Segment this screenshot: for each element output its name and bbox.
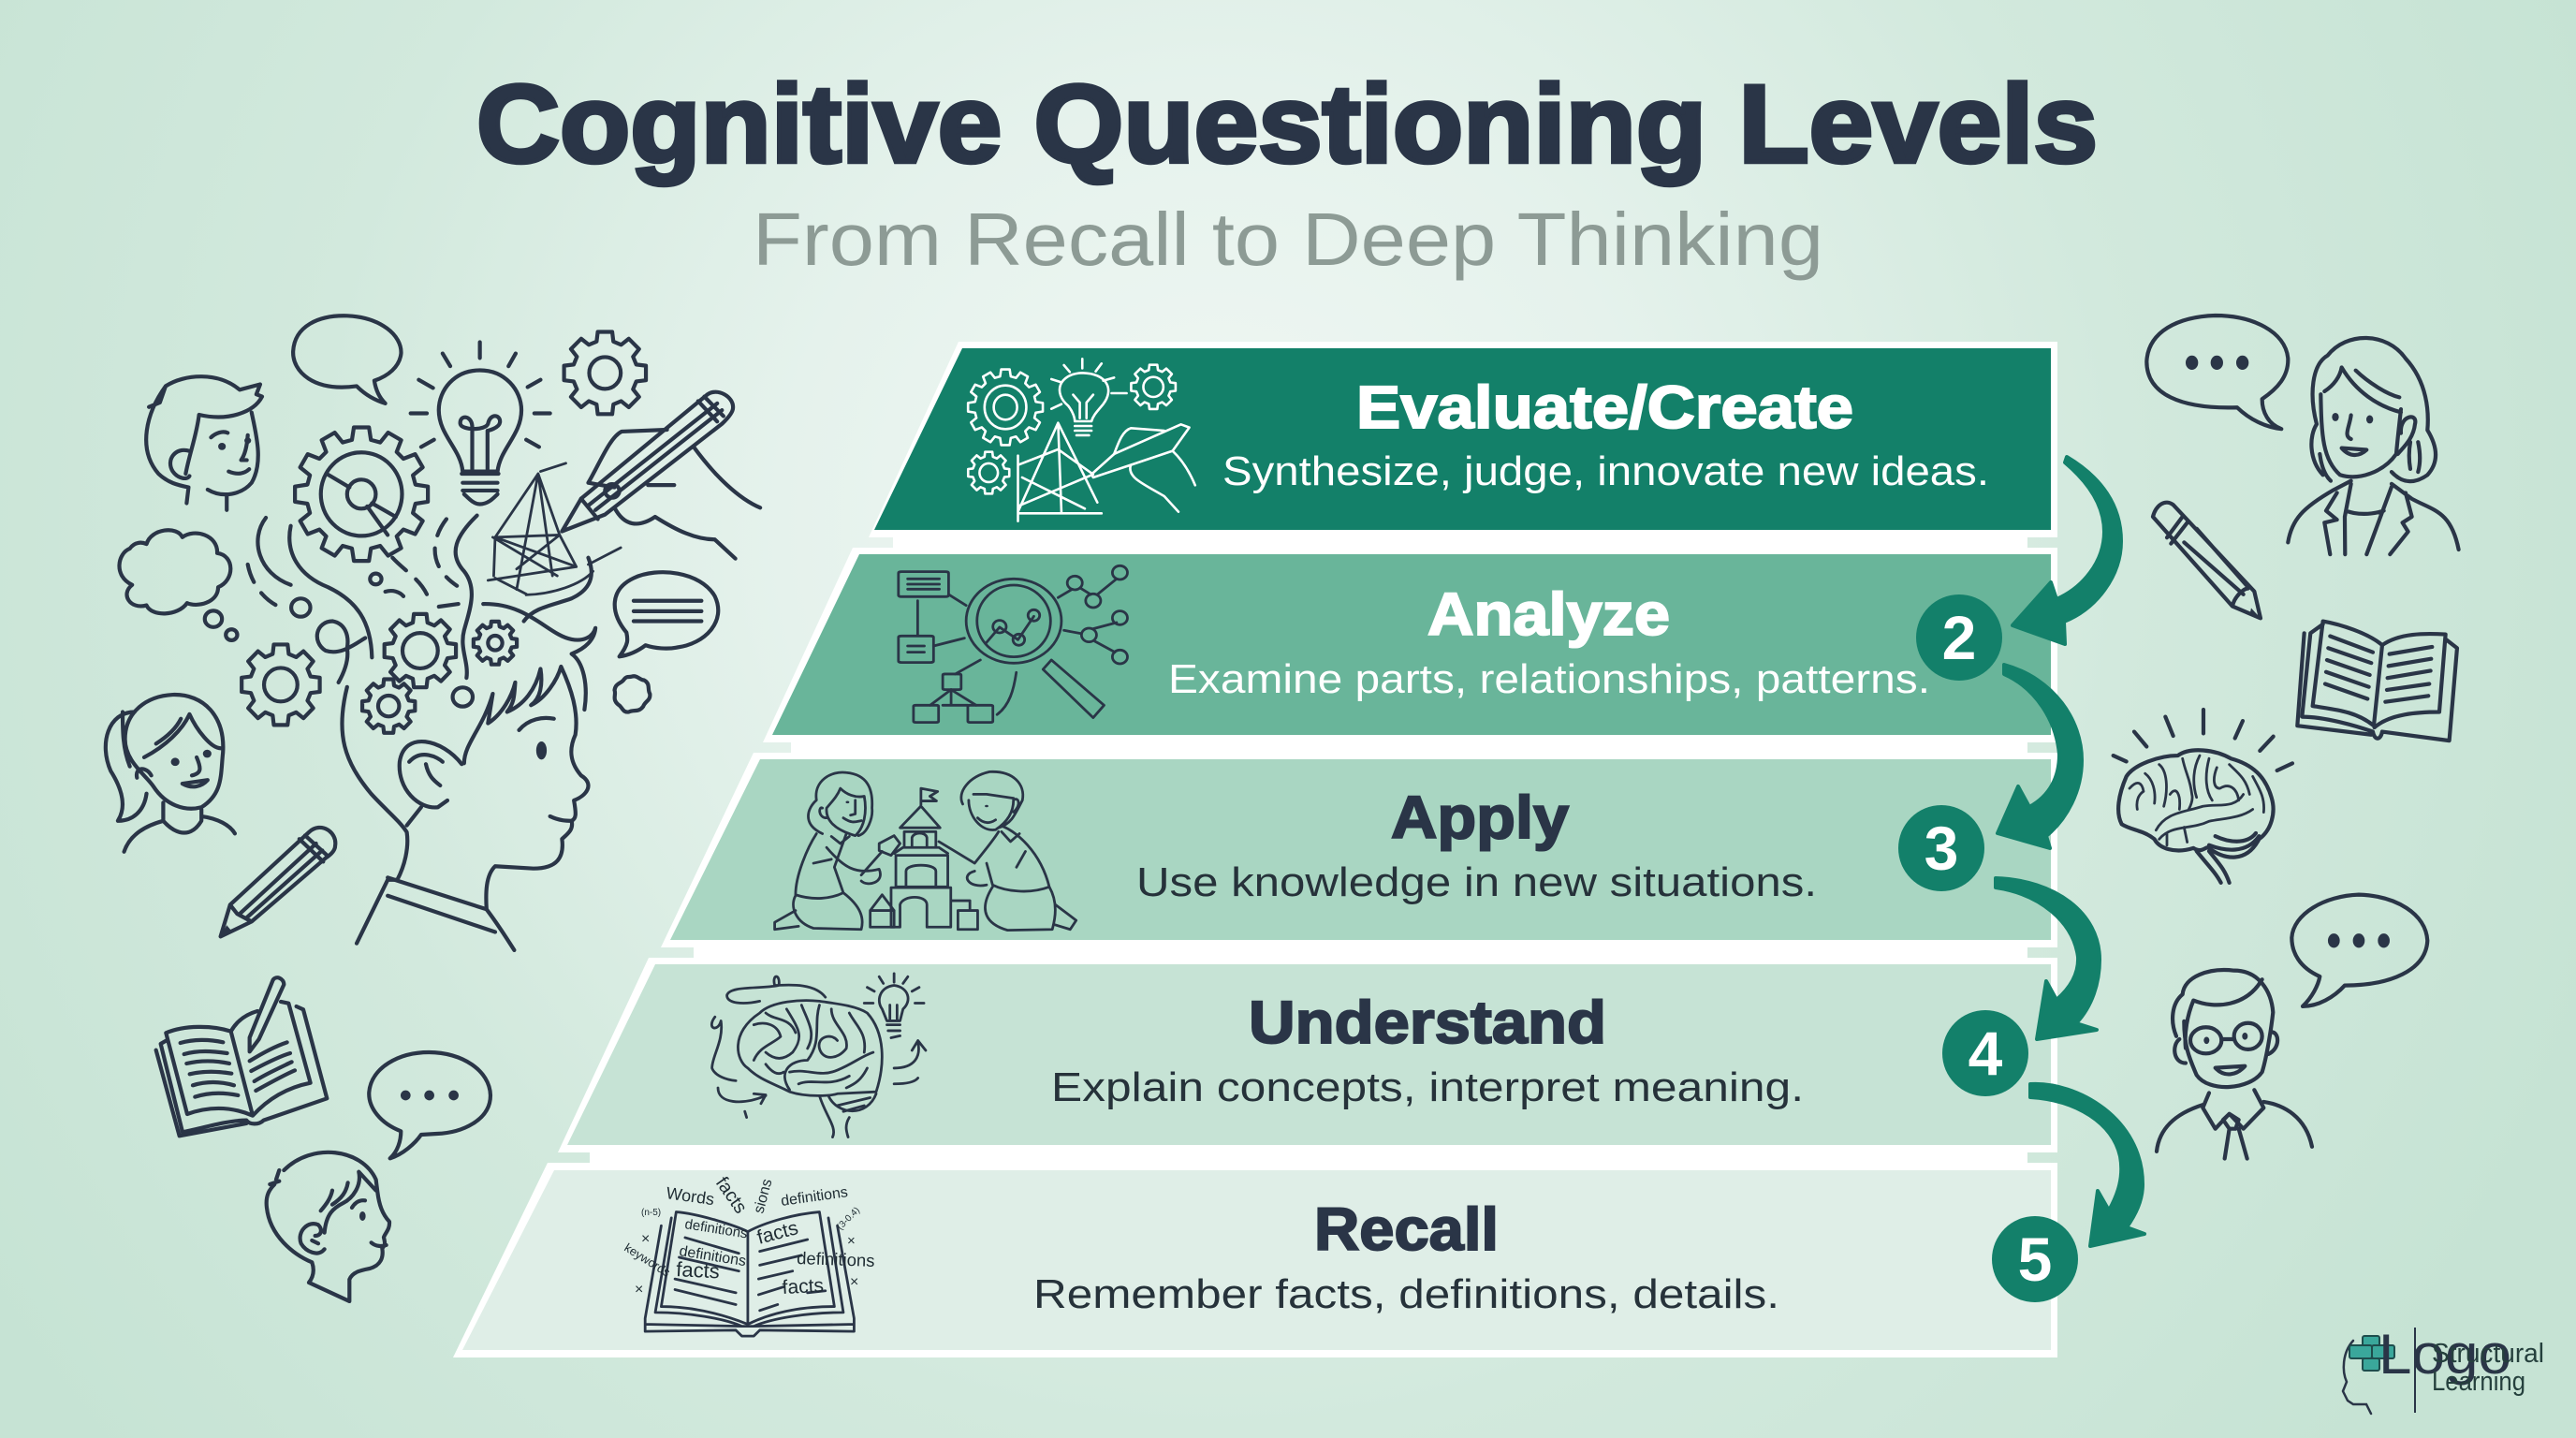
icon: speech bubble top	[2146, 315, 2288, 429]
icon: large gear	[295, 428, 428, 561]
number badge 3	[1898, 805, 1984, 891]
tier 4 fill	[567, 964, 2051, 1145]
illustration: left thinking cluster	[106, 315, 760, 950]
logo: Learning: Learning	[2432, 1367, 2525, 1397]
page word 5: definitions	[797, 1248, 875, 1270]
page word 4: facts	[754, 1217, 800, 1249]
level 3 heading: Apply	[1391, 784, 1569, 851]
icon: brain with light bulb (level 4)	[711, 974, 926, 1137]
tier 3 white frame	[661, 753, 2057, 947]
icon: wireframe pyramid	[488, 463, 621, 594]
tier 4 white frame	[558, 958, 2057, 1152]
tier gap 3	[694, 947, 2027, 959]
badge circle 4	[1942, 1010, 2028, 1096]
level 1 description: Synthesize, judge, innovate new ideas.	[1222, 448, 1989, 494]
icon: children building a block castle (level 3)	[775, 771, 1076, 931]
illustration: lower left book and child	[156, 977, 490, 1301]
tier 2 fill	[772, 554, 2051, 735]
badge number 5: 5	[2018, 1225, 2052, 1294]
icon: brain with rays	[2114, 710, 2292, 883]
marks: ×	[641, 1231, 650, 1247]
tier 5 white frame	[453, 1163, 2057, 1357]
illustration: right column people and icons	[2114, 315, 2459, 1159]
level 2 description: Examine parts, relationships, patterns.	[1168, 656, 1930, 702]
level 2 heading: Analyze	[1427, 580, 1670, 648]
page word 6: facts	[782, 1275, 825, 1299]
badge circle 2	[1916, 594, 2002, 681]
icon: small gear left	[362, 680, 415, 733]
logo	[2343, 1323, 2544, 1414]
icon: pencil right	[2153, 503, 2261, 618]
icon: magnifier and network (level 2)	[899, 565, 1127, 723]
icon: light bulb	[411, 342, 550, 504]
floating words: Words	[665, 1183, 715, 1209]
tier 1 white frame	[869, 342, 2057, 537]
badge circle 5	[1992, 1216, 2078, 1302]
word: keywords: keywords	[622, 1240, 673, 1280]
icon: open book right	[2297, 622, 2457, 741]
icon: thinking boy in profile	[342, 558, 595, 950]
level 4 heading: Understand	[1249, 989, 1606, 1056]
badge number 2: 2	[1942, 603, 1976, 672]
thought bubbles and swirl lines	[248, 516, 477, 707]
logo: placeholder word: Logo	[2378, 1323, 2511, 1386]
icon: girl with ponytail	[106, 695, 235, 852]
icon: small gear right	[474, 622, 517, 665]
tier gap 1	[893, 537, 2027, 549]
icon: empty speech bubble	[293, 315, 401, 404]
word: left formula: (n-5)	[641, 1208, 661, 1218]
page word 3: facts	[676, 1257, 720, 1283]
word: definitions top: definitions	[780, 1184, 849, 1210]
arrow: level 4 to 5	[2030, 1084, 2144, 1246]
logo: teal blocks	[2349, 1336, 2394, 1371]
page word 1: definitions	[683, 1216, 749, 1242]
marks lower right: ×	[850, 1274, 858, 1290]
level 3 description: Use knowledge in new situations.	[1136, 859, 1817, 905]
icon: open book with words (level 5)	[622, 1173, 875, 1336]
icon: teacher woman	[2288, 338, 2459, 554]
level 5 heading: Recall	[1314, 1196, 1499, 1263]
icon: thought cloud	[119, 530, 237, 640]
level 5 description: Remember facts, definitions, details.	[1033, 1271, 1779, 1317]
icon: top right gear	[564, 331, 646, 414]
logo: divider	[2414, 1328, 2416, 1413]
tier 5 fill	[462, 1170, 2051, 1350]
arrow: level 1 to 2	[2012, 457, 2121, 644]
icon: open book with pencil	[156, 977, 327, 1136]
icon: left gear	[242, 644, 320, 725]
icon: speech bubble with dots	[369, 1052, 490, 1158]
icon: speech bubble lower	[2291, 895, 2427, 1006]
arrow: level 3 to 4	[1996, 878, 2100, 1039]
number badge 5	[1992, 1216, 2078, 1302]
logo: head outline	[2343, 1341, 2371, 1414]
tier 2 white frame	[763, 548, 2057, 742]
tier gap 2	[791, 742, 2027, 754]
number badge 4	[1942, 1010, 2028, 1096]
icon: centre gear	[385, 614, 456, 687]
arrow: level 2 to 3	[1998, 665, 2082, 848]
page word 2: definitions	[678, 1243, 747, 1269]
subtitle: From Recall to Deep Thinking	[753, 198, 1823, 281]
book drawing	[645, 1212, 854, 1336]
badge circle 3	[1898, 805, 1984, 891]
badge number 3: 3	[1925, 814, 1958, 883]
icon: man with glasses	[2157, 970, 2312, 1159]
title: Cognitive Questioning Levels	[476, 63, 2098, 186]
icon: tiny cog	[615, 676, 650, 712]
icon: boy face	[146, 376, 262, 510]
icon: right lined speech bubble	[615, 572, 718, 656]
tier 1 fill	[874, 348, 2051, 530]
marks lower left: ×	[635, 1282, 643, 1298]
icon: child profile	[267, 1152, 389, 1301]
marks right: ×	[847, 1233, 856, 1249]
icon: left pencil	[221, 828, 335, 936]
logo: Structural: Structural	[2432, 1339, 2544, 1369]
number badge 2	[1916, 594, 2002, 681]
word: facts: facts	[711, 1173, 751, 1217]
panel: pyramid levels	[453, 342, 2057, 1357]
icon: hand holding pencil	[562, 392, 760, 559]
icon: gears, bulb, pyramid and pencil (level 1)	[968, 359, 1195, 521]
badge number 4: 4	[1969, 1019, 2003, 1088]
level 1 heading: Evaluate/Create	[1356, 374, 1853, 441]
tier gap 4	[590, 1152, 2027, 1164]
level 4 description: Explain concepts, interpret meaning.	[1051, 1064, 1804, 1110]
word: sions: sions	[751, 1178, 776, 1215]
word: right formula: (3-0.4)	[835, 1206, 862, 1232]
tier 3 fill	[670, 759, 2051, 940]
